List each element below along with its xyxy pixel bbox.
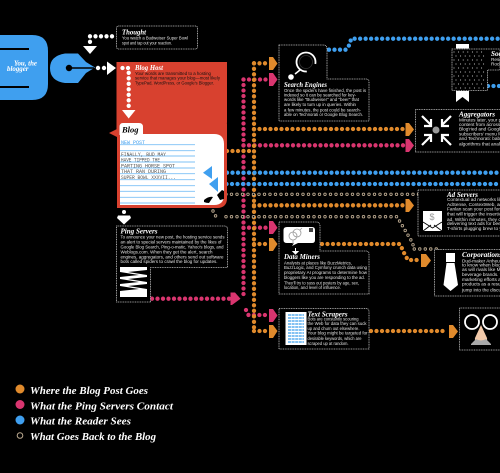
connector: orange blog post routes: [227, 63, 447, 331]
panel: corporations: Corporations: [462, 251, 500, 259]
panel: corporations: [434, 250, 500, 296]
panel: ping servers: To announce your new post, the hosting service sends: [120, 234, 225, 240]
legend item: pink: What the Ping Servers Contact: [30, 402, 174, 412]
panel: data miners: They'll try to suss out posters by age, sex,: [284, 280, 359, 286]
icon: converging arrows: [422, 116, 451, 145]
panel: blog: HAVE TIPPED THE: [121, 158, 160, 164]
panel: data miners: Data Miners: [283, 253, 320, 261]
connector: pink ping server routes: [152, 80, 404, 315]
panel: thought: spot and tap out your reaction.: [122, 40, 172, 46]
legend: [16, 384, 174, 443]
panel: data miners: proprietary AI programs to determine how: [284, 270, 368, 275]
panel: text scrapers: up and churn out elsewhere.: [308, 326, 360, 331]
panel: data miners: location, and level of influence.: [284, 285, 341, 290]
panel: social media: [452, 44, 500, 102]
panel: blog: [109, 123, 227, 208]
panel: text scrapers: desirable keywords, which are: [308, 336, 362, 341]
panel: data miners: BuzzLogic, and Cymfony crunch data using: [284, 265, 367, 270]
icon: speech bubble with symbols: [284, 227, 315, 254]
icon: you, the blogger: You, the: [14, 58, 38, 68]
panel: search engines: a few minutes, the post could be search-: [284, 108, 361, 112]
icon: necktie: [444, 253, 458, 291]
panel: ping servers: [116, 226, 228, 302]
arrow: pink to data routes: [230, 292, 240, 305]
icon: magnifier: [288, 52, 316, 80]
arrow: pen to thought: [83, 36, 112, 54]
icon: you, the blogger: [0, 35, 48, 100]
panel: ad servers: Ad Servers: [446, 191, 478, 199]
panel: ping servers: Google Blog Search, Ping-o-matic, Yahoo's blogs, and: [120, 244, 224, 249]
connector: tan routes back to the blog: [213, 194, 440, 262]
panel: search engines: are likely to turn up in queries. Within: [284, 102, 356, 107]
icon: glasses and nose: [465, 315, 497, 345]
panel: text scrapers: Text Scrapers: [308, 310, 348, 318]
legend item: tan: What Goes Back to the Blog: [30, 432, 156, 443]
panel: ping servers: an alert to special servers maintained by the likes of: [120, 239, 222, 244]
panel: blog: NEW POST: [121, 140, 145, 146]
panel: search engines: words like "Budweiser" and "beer" that: [284, 97, 360, 102]
pattern block: [454, 52, 485, 88]
icon: document: [286, 312, 306, 345]
panel: search engines: [279, 45, 369, 121]
icon: pen nib: [50, 54, 95, 83]
panel: blog host: [116, 62, 227, 134]
panel: search engines: Once the spiders have finished, the post is: [284, 88, 367, 93]
panel: data miners: Analysts at places like BuzzMetrics,: [284, 260, 352, 266]
panel: ping servers: Ping Servers: [120, 228, 158, 236]
legend item: orange: Where the Blog Post Goes: [30, 386, 148, 397]
panel: aggregators: [416, 110, 500, 152]
panel: ping servers: Weblogs.com. When they get the alert, search: [120, 249, 213, 254]
panel: text scrapers: [279, 308, 369, 349]
panel: blog host: service that manages your blog—most likely: [135, 76, 221, 81]
legend item: blue: What the Reader Sees: [30, 416, 131, 428]
panel: text scrapers: scraped up at random.: [308, 341, 348, 346]
arrows: service entry markers: [269, 57, 458, 338]
panel: data miners: [279, 222, 369, 294]
panel: ping servers: engines, aggregators, and others send out software: [120, 254, 224, 259]
arrow: pen to blog host: [96, 62, 116, 75]
panel: disguise box: [460, 308, 500, 350]
panel: search engines: Search Engines: [284, 81, 327, 89]
panel: blog host: Blog Host: [134, 64, 164, 72]
icon: server spring: [120, 267, 147, 297]
panel: text scrapers: Bots are constantly scouring: [308, 316, 359, 322]
panel: text scrapers: Your blog might be targeted for: [308, 330, 368, 336]
panel: search engines: indexed so it can be searched for key-: [284, 92, 356, 98]
icon: you, the blogger: blogger: [7, 64, 29, 73]
panel: thought: You watch a Budweiser Super Bowl: [122, 36, 188, 40]
panel: blog host: Your words are transmitted to a hosting: [135, 71, 211, 76]
panel: thought: [116, 26, 198, 49]
panel: blog: FINALLY, BUD MAY: [121, 152, 167, 158]
connector: blue reader routes: [216, 39, 500, 184]
icon: envelope with dollar: $: [430, 212, 435, 222]
panel: text scrapers: the Web for data they can suck: [308, 321, 367, 326]
panel: search engines: able on Technorati or Google Blog Search.: [284, 112, 363, 117]
panel: aggregators: Aggregators: [458, 110, 495, 118]
panel: blog host: TypePad, WordPress, or Google's Blogger.: [135, 80, 214, 85]
panel: ping servers: bots called spiders to crawl the blog for updates.: [120, 259, 218, 264]
arrow: blog to ping servers: [117, 210, 131, 224]
panel: blog: SUPER BOWL XXXVII...: [121, 175, 176, 181]
panel: blog: PARTING HORSE SPOT: [121, 164, 175, 170]
panel: blog: Blog: [121, 124, 139, 134]
panel: blog: THAT RAN DURING: [121, 169, 166, 175]
panel: thought: Thought: [122, 28, 147, 36]
panel: ad servers: [418, 190, 500, 236]
panel: data miners: bloggers like you are responding to the ad.: [284, 275, 365, 280]
